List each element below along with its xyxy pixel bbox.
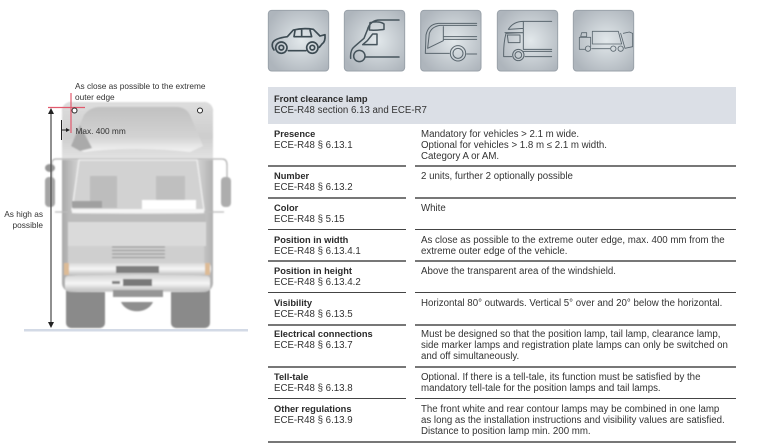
row: visibility [274,298,722,320]
row: position in height: ECE-R48 § 6.13.4.2 [274,277,361,288]
row: presence: Optional for vehicles > 1.8 m ≤ 2.1 m width. [421,140,607,151]
annotation: as high as possible [4,208,43,230]
row: other regulations: Distance to position lamp min. 200 mm. [421,426,591,437]
row: position in height: Position in height [274,266,352,276]
row: position in width [274,235,725,257]
red marker lines [48,93,85,133]
row: color [274,203,446,225]
row: position in height: Above the transparent area of the windshield. [421,266,616,277]
row: presence: Presence [274,129,315,139]
annotation: as high as possible: As high as [4,208,43,218]
row: other regulations: ECE-R48 § 6.13.9 [274,415,353,426]
row: position in height [274,266,616,288]
icon: bus [421,10,481,71]
row: presence [274,129,607,162]
row: visibility: Horizontal 80° outwards. Vertical 5° over and 20° below the horizontal. [421,298,722,309]
row: tell-tale: Optional. If there is a tell-tale, its function must be satisfied by the [421,372,700,383]
row: other regulations: The front white and rear contour lamps may be combined in one lamp [421,404,719,415]
row: tell-tale: mandatory tell-tale for the position lamps and tail lamps. [421,383,661,394]
row: position in width: As close as possible to the extreme outer edge, max. 400 mm from the [421,235,725,246]
row: electrical connections: and off simultaneously. [421,351,519,362]
vehicle category icons [268,10,634,71]
icon: car [268,10,329,71]
table header band: ECE-R48 section 6.13 and ECE-R7 [274,105,427,116]
row: electrical connections: Must be designed so that the position lamp, tail lamp, clearance lamp, [421,329,720,340]
row: position in width: ECE-R48 § 6.13.4.1 [274,246,361,257]
row: visibility: ECE-R48 § 6.13.5 [274,309,353,320]
row: number [274,171,573,193]
row: position in width: Position in width [274,235,348,245]
row: number: 2 units, further 2 optionally possible [421,171,573,182]
row: other regulations [274,404,725,437]
table header band: Front clearance lamp [274,94,368,104]
annotation: outer edge [75,80,206,102]
width arrow [62,120,70,140]
row: electrical connections [274,329,728,362]
row: tell-tale: Tell-tale [274,372,308,382]
icon: garbage truck [573,10,634,71]
row: presence: Category A or AM. [421,151,499,162]
row: position in width: extreme outer edge of the vehicle. [421,246,567,257]
annotation: as high as possible: possible [13,220,43,230]
table header band [268,87,736,124]
annotation: max 400 mm: Max. 400 mm [76,126,126,136]
row: number: ECE-R48 § 6.13.2 [274,182,353,193]
row: electrical connections: ECE-R48 § 6.13.7 [274,340,353,351]
row: other regulations: as long as the installation instructions and visibility values are satisfied. [421,415,725,426]
icon: truck [497,10,558,71]
ground line [24,329,248,332]
row: other regulations: Other regulations [274,404,352,414]
row: color: White [421,203,446,214]
row: number: Number [274,171,309,181]
height arrow [48,108,54,328]
row: presence: Mandatory for vehicles > 2.1 m wide. [421,129,579,140]
lamp left [72,108,77,113]
row: electrical connections: side marker lamps and registration plate lamps can only be switched on [421,340,728,351]
row: visibility: Visibility [274,298,312,308]
annotation: outer edge: As close as possible to the extreme [75,80,206,90]
row: electrical connections: Electrical connections [274,329,373,339]
annotation: outer edge: outer edge [75,92,115,102]
row: color: ECE-R48 § 5.15 [274,214,345,225]
row: color: Color [274,203,298,213]
row: presence: ECE-R48 § 6.13.1 [274,140,353,151]
row: tell-tale: ECE-R48 § 6.13.8 [274,383,353,394]
lamp right [198,108,202,113]
icon: van [344,10,405,71]
row: tell-tale [274,372,700,394]
